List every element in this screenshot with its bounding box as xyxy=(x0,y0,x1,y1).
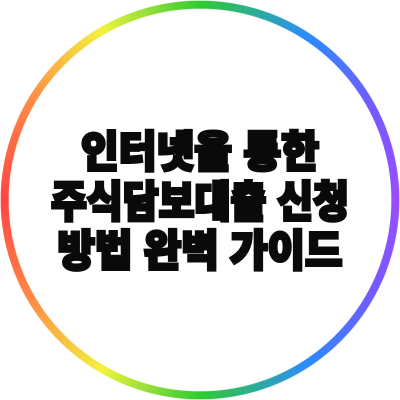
title line 3: 방법 완벽 가이드 xyxy=(58,228,342,276)
title line 1: 인터넷을 통한 xyxy=(81,129,319,177)
title line 2: 주식담보대출 신청 xyxy=(51,179,349,227)
